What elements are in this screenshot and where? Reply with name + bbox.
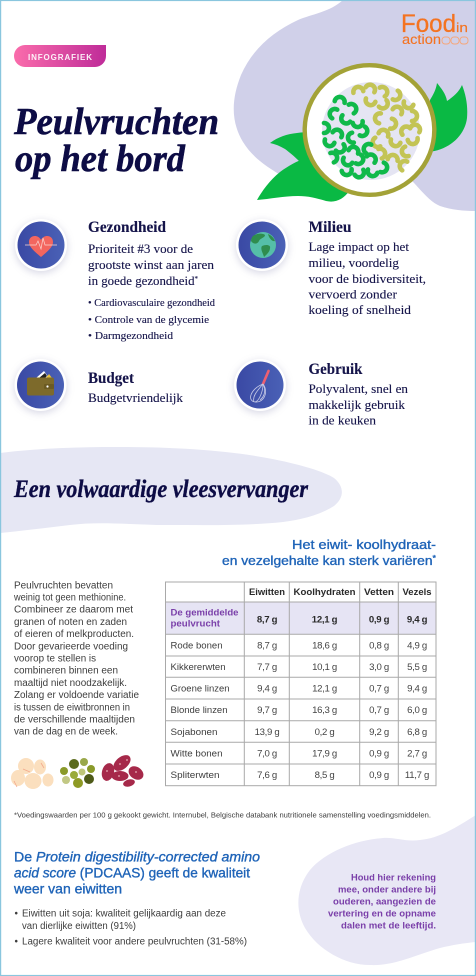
text block [308, 381, 408, 428]
rows: Kikkererwten [170, 662, 226, 673]
text block [308, 239, 426, 317]
logo: Food in action [401, 10, 468, 47]
rows: 8,5 g [315, 770, 334, 781]
text block: in de keuken [308, 412, 377, 428]
paragraph: combining proteins: granen of noten en zaden [14, 617, 127, 628]
callout: note for older people: vertering en de opname [328, 909, 436, 920]
rows: Blonde linzen [170, 705, 228, 716]
rows: Groene linzen [170, 684, 230, 695]
text block: koeling of snelheid [308, 302, 412, 317]
highlighted row: average: 12,1 g [312, 615, 338, 626]
paragraph: combining proteins: is tussen de eiwitbronnen in [14, 702, 130, 713]
icon: whisk [234, 359, 286, 411]
rows: 9,4 g [407, 684, 427, 695]
icon: leaves right [428, 83, 467, 152]
rows: Rode bonen [170, 640, 222, 651]
label pill: INFOGRAFIEK [14, 45, 106, 67]
bullet list: van dierlijke eiwitten (91%) [22, 921, 136, 932]
rows: 0,8 g [369, 640, 389, 651]
bullet list: Eiwitten uit soja: kwaliteit gelijkaardig aan deze [22, 909, 227, 920]
paragraph: combining proteins: combineren binnen een [14, 666, 118, 677]
rows: Sojabonen [170, 727, 218, 738]
title [13, 101, 219, 180]
table heading: Het eiwit- koolhydraat- [292, 538, 436, 552]
rows: 4,9 g [407, 640, 427, 651]
text block: Polyvalent, snel en [308, 381, 408, 396]
bullet list: Lagere kwaliteit voor andere peulvruchten (31-58%) [22, 936, 247, 947]
paragraph: combining proteins: Combineer ze daarom met [14, 605, 133, 616]
table header: Eiwitten [249, 586, 285, 597]
icon: wallet [14, 359, 66, 411]
rows: 2,7 g [407, 749, 427, 760]
callout: note for older people: Houd hier rekening [351, 872, 436, 883]
legumes: olive [353, 83, 422, 170]
rows: 6,0 g [407, 705, 427, 716]
rows: 13,9 g [255, 727, 279, 738]
icon: heart [15, 219, 67, 271]
table header: Vetten [364, 586, 394, 597]
title: Peulvruchten [13, 101, 219, 143]
paragraph: combining proteins: Zolang er voldoende variatie [14, 690, 140, 701]
icon: globe [236, 219, 288, 271]
rows: 0,9 g [369, 770, 389, 781]
nutrition table [166, 582, 436, 786]
rows: Spliterwten [170, 770, 220, 781]
plate [305, 65, 434, 195]
logo: Food in action: in [456, 20, 468, 35]
label pill: INFOGRAFIEK: INFOGRAFIEK [28, 53, 92, 62]
section heading: Een volwaardige vleesvervanger: Een volwaardige vleesvervanger [13, 476, 308, 503]
text block: • Cardiovasculaire gezondheid [88, 298, 216, 309]
rows: 16,3 g [312, 705, 337, 716]
text block: grootste winst aan jaren [88, 257, 215, 272]
rows: Witte bonen [170, 749, 222, 760]
paragraph: combining proteins: maaltijd niet noodzakelijk. [14, 678, 127, 689]
logo: Food in action: Food [401, 10, 456, 38]
rows: 0,7 g [369, 705, 389, 716]
table heading: en vezelgehalte kan sterk variëren [222, 554, 412, 568]
table heading [222, 538, 436, 568]
PDCAAS heading: weer van eiwitten [13, 881, 122, 896]
highlighted row: average: 9,4 g [407, 615, 428, 626]
item: Budget [14, 359, 184, 411]
rows: 11,7 g [405, 770, 429, 781]
logo: Food in action: action [402, 32, 441, 47]
background blob: top right [234, 0, 476, 211]
paragraph: combining proteins: Door gevarieerde voeding [14, 641, 128, 652]
paragraph: combining proteins [13, 580, 140, 738]
rows: 6,8 g [407, 727, 427, 738]
icon: lentils [60, 758, 95, 788]
bullet list: • [14, 936, 18, 947]
text block: Prioriteit #3 voor de [88, 241, 193, 256]
footnote: *Voedingswaarden per 100 g gekookt gewicht. Internubel, Belgische databank nutritionele samenstelling voedingsmiddelen. [14, 811, 431, 820]
background blob: bottom right [298, 815, 476, 965]
table heading: * [433, 554, 436, 563]
rows: 0,2 g [315, 727, 334, 738]
paragraph: combining proteins: van de dag en de week. [14, 727, 118, 738]
icon: leaf lower left [257, 158, 350, 202]
icon: chickpeas [11, 758, 54, 789]
rows: 7,6 g [257, 770, 277, 781]
paragraph: combining proteins: voorop te stellen is [14, 654, 96, 664]
table header: Koolhydraten [294, 586, 356, 597]
heading: Gebruik [308, 361, 363, 378]
PDCAAS heading: acid score (PDCAAS) geeft de kwaliteit [14, 866, 250, 880]
highlighted row: average: De gemiddelde [170, 608, 238, 619]
rows: 9,7 g [257, 705, 277, 716]
highlighted row: average [170, 608, 428, 630]
item: Gezondheid [15, 219, 216, 342]
highlighted row: average: peulvrucht [170, 619, 221, 630]
PDCAAS heading: De Protein digestibility-corrected amino [14, 850, 261, 865]
rows: 17,9 g [312, 749, 337, 760]
text block: Budgetvriendelijk [88, 390, 184, 405]
rows: 0,9 g [369, 749, 389, 760]
paragraph: combining proteins: of eieren of melkproducten. [14, 629, 134, 640]
section heading: Een volwaardige vleesvervanger [0, 447, 342, 533]
PDCAAS heading [13, 850, 261, 896]
icon: red beans [100, 752, 146, 788]
bullet list [14, 909, 247, 947]
text block: * [195, 275, 198, 283]
callout: note for older people: dalen met de leeftijd. [341, 921, 436, 932]
rows: 12,1 g [312, 684, 337, 695]
rows: 0,7 g [369, 684, 389, 695]
text block: • Controle van de glycemie [88, 315, 209, 326]
rows: 18,6 g [312, 640, 337, 651]
heading: Milieu [308, 219, 352, 236]
text block: makkelijk gebruik [308, 397, 406, 412]
text block: in goede gezondheid [88, 273, 196, 288]
callout: note for older people: mee, onder andere bij [338, 884, 436, 896]
bullet list: • [14, 909, 18, 920]
highlighted row: average: 8,7 g [257, 615, 278, 626]
text block: milieu, voordelig [308, 255, 399, 270]
legumes: green [323, 96, 389, 179]
heading: Gezondheid [88, 219, 166, 236]
table header [249, 586, 432, 597]
rows: 10,1 g [312, 662, 337, 673]
text block: voor de biodiversiteit, [308, 271, 426, 286]
text block: Lage impact op het [308, 239, 409, 254]
rows: 9,2 g [369, 727, 389, 738]
paragraph: combining proteins: Peulvruchten bevatten [14, 580, 113, 591]
illustration: plate with legumes and leaves [257, 65, 467, 202]
text block [88, 241, 216, 342]
highlighted row: average: 0,9 g [369, 615, 390, 626]
item: Milieu [236, 219, 426, 317]
title: op het bord [15, 138, 186, 180]
rows: 5,5 g [407, 662, 427, 673]
icon: leaf upper left [270, 132, 325, 175]
heading: Budget [88, 370, 135, 387]
rows: 3,0 g [369, 662, 389, 673]
rows: 7,7 g [257, 662, 277, 673]
paragraph: combining proteins: weinig tot geen methionine. [13, 592, 126, 604]
rows [170, 640, 429, 781]
callout: note for older people: ouderen, aangezien de [333, 897, 436, 908]
item: Gebruik [234, 359, 408, 428]
paragraph: combining proteins: de verschillende maaltijden [14, 714, 135, 726]
rows: 9,4 g [257, 684, 277, 695]
table header: Vezels [402, 586, 432, 597]
text block: • Darmgezondheid [88, 331, 174, 342]
rows: 8,7 g [257, 640, 277, 651]
rows: 7,0 g [257, 749, 277, 760]
callout: note for older people [328, 872, 436, 932]
text block: vervoerd zonder [308, 286, 398, 302]
